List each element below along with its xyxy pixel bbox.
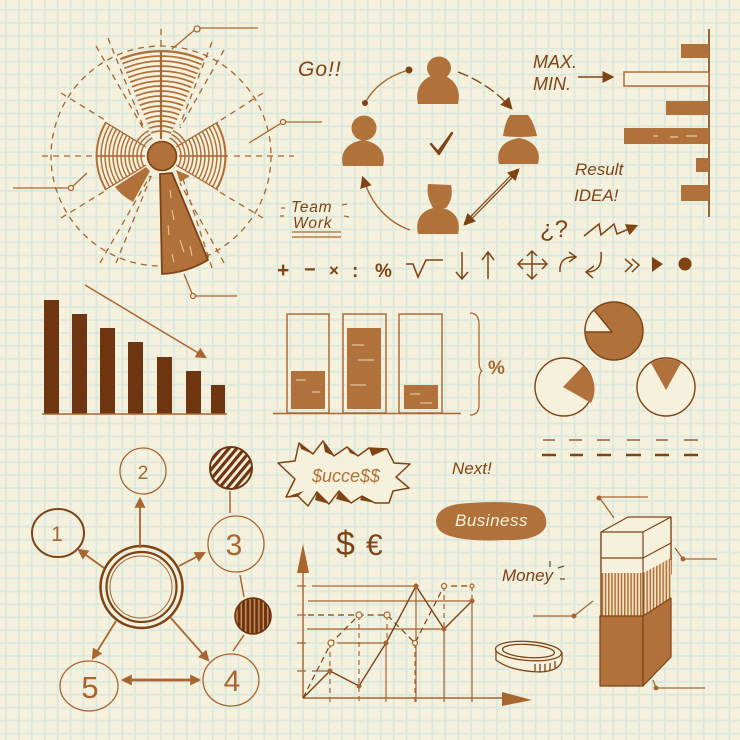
column callouts: [533, 496, 717, 690]
label: Result IDEA!: [574, 160, 624, 205]
node 1: 1: [51, 523, 63, 546]
node 2: [120, 448, 166, 494]
central rings: [100, 546, 182, 628]
solid series: [303, 586, 472, 698]
coin: [495, 639, 562, 672]
dashed series verticals: [330, 586, 472, 703]
success burst: $ucce$$: [311, 466, 381, 486]
check mark: [431, 133, 452, 154]
dashed series: [303, 586, 472, 698]
node 2: 2: [138, 463, 148, 484]
burst shadow wedges: [286, 441, 387, 504]
person bottom: [417, 184, 459, 234]
node 1: [32, 509, 84, 557]
arrows and signs: [456, 251, 639, 279]
arc end dots: [362, 66, 412, 106]
dotted arc go: [365, 70, 409, 103]
pie left: [535, 358, 595, 416]
maths symbol row: %: [375, 261, 392, 282]
white block: [601, 517, 671, 574]
ribbed top sector: [120, 50, 204, 140]
dashed guide circle and rays: [42, 29, 294, 268]
label: Money: [502, 561, 565, 585]
radial fan chart: [13, 26, 322, 298]
label: MAX. MIN.: [533, 52, 577, 94]
connectors: [230, 491, 244, 651]
root sign: [406, 260, 443, 277]
node 5: [60, 661, 118, 711]
line chart: [297, 544, 532, 706]
network diagram: [32, 447, 271, 711]
arrow to left person: [363, 178, 410, 230]
zigzag arrow: [584, 224, 636, 236]
label: Go!!: Go!!: [298, 58, 342, 81]
solid bottom sector: [160, 173, 208, 274]
maths symbol row: ×: [329, 261, 339, 280]
currency symbols: [336, 525, 383, 563]
operators: +: [277, 259, 289, 282]
currency symbols: €: [366, 529, 383, 562]
node 3: 3: [226, 529, 242, 562]
label: MAX. MIN.: MIN.: [533, 74, 571, 94]
person right: [498, 115, 539, 164]
pie top: [585, 302, 643, 360]
callout leaders: [13, 26, 322, 298]
label: Team Work: Work: [293, 215, 333, 232]
label: Next!: Next!: [452, 459, 492, 478]
hatched circle lower: [235, 598, 271, 634]
person left: [342, 116, 384, 166]
label: MAX. MIN.: MAX.: [533, 52, 577, 72]
team cycle diagram: [342, 56, 539, 234]
person top: [417, 56, 459, 104]
node 3: [208, 516, 264, 572]
hub: [145, 139, 179, 173]
label: Money: Money: [502, 566, 555, 585]
node 4: 4: [224, 665, 240, 698]
solid block front: [600, 616, 643, 686]
label: Team Work: Team: [291, 199, 332, 216]
node 4: [203, 654, 259, 706]
grid guide lines: [297, 586, 472, 702]
brace: [470, 313, 482, 415]
dash rows: [542, 440, 698, 455]
solid block side: [643, 598, 671, 686]
dashed arrow to right person: [458, 72, 511, 108]
arrow to bars: [578, 76, 612, 78]
axes: [303, 570, 510, 698]
bar texture: [296, 345, 432, 403]
label: Team Work: [280, 199, 349, 237]
falling bar chart: [42, 285, 227, 414]
success burst: [278, 441, 410, 506]
label: Result IDEA!: Result: [575, 160, 624, 179]
trend arrow: [85, 285, 205, 357]
currency symbols: $: [336, 525, 355, 563]
edges: [601, 517, 671, 616]
arrows from centre: [79, 499, 208, 680]
pie trio: [535, 302, 695, 416]
business pill: Business: [455, 511, 528, 530]
solid lower side sectors: [115, 167, 190, 202]
maths symbol row: :: [352, 261, 358, 282]
hatched band: [600, 558, 671, 616]
pie right: [637, 358, 695, 416]
small ribbed inner sectors: [136, 130, 186, 146]
ribbed left sector: [96, 122, 147, 190]
horizontal bar chart: [624, 29, 709, 217]
percent sign: %: [488, 358, 505, 379]
question marks: ¿?: [540, 216, 568, 243]
double arrow bottom right: [465, 170, 518, 224]
ribbed right sector: [176, 122, 228, 190]
percent bar chart: [273, 313, 505, 415]
maths symbol row: [277, 251, 692, 282]
node 5: 5: [81, 670, 99, 705]
label: Result IDEA!: IDEA!: [574, 186, 619, 205]
business pill: [436, 502, 546, 540]
maths symbol row: −: [304, 259, 316, 281]
stacked 3D column: [600, 517, 671, 686]
hatched circle top: [210, 447, 252, 489]
